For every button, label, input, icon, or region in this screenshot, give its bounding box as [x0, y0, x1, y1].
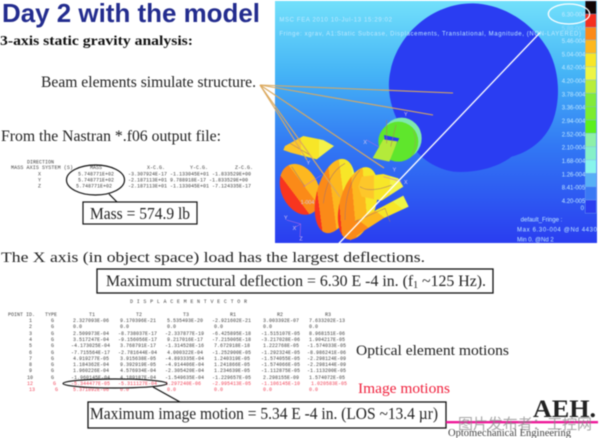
- colour scale labels: 0: [581, 206, 585, 212]
- displacement table: -4.914406E-04: [165, 362, 204, 368]
- large primary mirror disk: [389, 3, 558, 172]
- maximum value highlight: [338, 4, 590, 244]
- displacement table: TYPE: [45, 312, 57, 318]
- displacement table: 1.960226E-04: [73, 368, 109, 374]
- displacement table: 6: [29, 350, 32, 356]
- displacement table: G: [51, 324, 54, 330]
- X axis statement: The X axis (in object space) load has the largest deflections.: [1, 250, 425, 266]
- axis letters: X: [404, 180, 408, 186]
- displacement table: -2.298144E-09: [307, 362, 346, 368]
- displacement table: 0.0: [167, 387, 176, 393]
- displacement table: 9.170396E-21: [120, 318, 156, 324]
- colour scale bar: [585, 1, 596, 213]
- lens group two: [330, 162, 386, 244]
- displacement table: 0.0: [309, 324, 318, 330]
- colour scale labels: 3.78-004: [562, 92, 586, 98]
- coordinate axes markers: [287, 140, 402, 237]
- displacement table: POINT ID.: [8, 312, 35, 318]
- colour scale labels: 6.30-004: [562, 13, 586, 19]
- displacement table: -1.229657E-05: [212, 375, 251, 381]
- displacement table: 3.915638E-05: [120, 356, 156, 362]
- colour scale labels: 3.36-004: [562, 106, 586, 112]
- displacement table: G: [51, 350, 54, 356]
- colour scale labels: 5.88-004: [562, 27, 586, 33]
- axis letters: Y: [404, 112, 408, 118]
- displacement table: -2.298124E-09: [307, 356, 346, 362]
- displacement table: 4: [29, 337, 32, 343]
- displacement table: G: [51, 318, 54, 324]
- displacement table: R2: [277, 312, 283, 318]
- mass output table: Y-C.G.: [190, 165, 208, 171]
- fold mirror green assembly: [373, 118, 422, 162]
- maximum image motion callout: [88, 402, 446, 428]
- displacement table: -1.113200E-05: [307, 368, 346, 374]
- maximum deflection callout: Maximum structural deflection = 6.30 E -4 in. (f: [106, 273, 416, 290]
- displacement table: 13: [29, 387, 35, 393]
- displacement table: G: [51, 343, 54, 349]
- displacement table: 0.0: [263, 324, 272, 330]
- displacement table: -1.960145E-04: [71, 375, 110, 381]
- axis letters: [284, 112, 408, 243]
- colour scale labels: 4.62-004: [562, 66, 586, 72]
- displacement table: -1.574055E-05: [261, 356, 300, 362]
- mass output table: MASS AXIS SYSTEM (S): [11, 165, 73, 171]
- axis letters: Y: [284, 215, 288, 221]
- mass callout ellipse: [66, 165, 124, 202]
- mass output table: 5.748771E+02: [76, 184, 112, 190]
- displacement table: 1: [29, 318, 32, 324]
- displacement table: 2.298155E-09: [263, 375, 299, 381]
- displacement table: 1.297240E-06: [165, 381, 201, 387]
- displacement table: -8.986241E-06: [307, 350, 346, 356]
- displacement table: 1.020583E-05: [311, 381, 347, 387]
- displacement table: 9: [29, 368, 32, 374]
- red-orange lens: [272, 157, 328, 221]
- displacement table: -1.252900E-05: [212, 350, 251, 356]
- plot footer text: Min 0. @Nd 2: [517, 237, 554, 243]
- displacement table: 1.184362E-04: [73, 362, 109, 368]
- Nastran output label: From the Nastran *.f06 output file:: [1, 128, 221, 145]
- displacement table: T3: [183, 312, 189, 318]
- mass output table: Z-C.G.: [235, 165, 253, 171]
- displacement table: -1.549635E-04: [165, 375, 204, 381]
- displacement table: 5.371892E-06: [73, 387, 109, 393]
- displacement table: -4.173025E-04: [71, 343, 110, 349]
- displacement table: -2.305420E-04: [165, 368, 204, 374]
- axis letters: Y: [307, 161, 311, 167]
- displacement table: 5.535493E-20: [167, 318, 203, 324]
- displacement table: 4.919277E-05: [73, 356, 109, 362]
- displacement table: 12: [27, 381, 33, 387]
- yellow wedge element: [358, 174, 403, 201]
- watermark: 图片发布者：工控网: [458, 416, 592, 433]
- displacement table: -1.574033E-05: [307, 343, 346, 349]
- plot footer text: [517, 218, 598, 243]
- image motion callout ellipse: [63, 379, 180, 402]
- displacement table: R3: [325, 312, 331, 318]
- colour scale labels: 1.26-004: [562, 172, 586, 178]
- displacement table: 8.968151E-06: [309, 331, 345, 337]
- displacement table: -1.314528E-16: [165, 343, 204, 349]
- colour scale labels: 4.20-005: [562, 199, 586, 205]
- mass callout box: Mass = 574.9 lb: [90, 204, 190, 223]
- plot header text: MSC FEA 2010 10-Jul-13 15:29:02: [279, 17, 393, 23]
- displacement table: T2: [136, 312, 142, 318]
- displacement table: 1.222768E-05: [263, 343, 299, 349]
- displacement table: -2.995413E-05: [212, 381, 251, 387]
- displacement table: -2.337877E-19: [165, 331, 204, 337]
- image motions label: Image motions: [358, 381, 450, 397]
- lens group one: [308, 155, 362, 237]
- colour scale labels: 2.10-004: [562, 146, 586, 152]
- axis letters: Y: [393, 167, 397, 173]
- colour scale labels: 4.20-004: [562, 79, 586, 85]
- plot header text: [279, 17, 581, 37]
- displacement table: -7.215005E-18: [212, 337, 251, 343]
- displacement table: G: [55, 387, 58, 393]
- displacement table: 1.241866E-05: [214, 362, 250, 368]
- displacement table: 3.003392E-07: [263, 318, 299, 324]
- mass output table: X-C.G.: [147, 165, 165, 171]
- displacement table: 0.0: [120, 324, 129, 330]
- displacement table: G: [51, 331, 54, 337]
- displacement table: G: [53, 381, 56, 387]
- plot header text: Fringe: xgrav, A1:Static Subcase, Displacements, Translational, Magnitude, (NON-LAYERED): [279, 31, 581, 37]
- displacement table: 0.0: [214, 387, 223, 393]
- maximum deflection callout: 1: [413, 280, 418, 291]
- mass output table: Y: [38, 178, 41, 184]
- optical element motions label: Optical element motions: [356, 343, 509, 359]
- displacement table: -1.106145E-10: [261, 381, 300, 387]
- mass output table: MASS: [90, 165, 102, 171]
- displacement table: G: [51, 356, 54, 362]
- displacement table: 0.0: [263, 387, 272, 393]
- displacement table: 0.0: [309, 387, 318, 393]
- maximum deflection callout: [97, 269, 493, 293]
- displacement table: 7: [29, 356, 32, 362]
- displacement table: -1.574066E-05: [261, 362, 300, 368]
- displacement table: 5: [29, 343, 32, 349]
- displacement table: 0.0: [73, 324, 82, 330]
- displacement table: -1.292324E-05: [261, 350, 300, 356]
- displacement table: G: [51, 337, 54, 343]
- mass output table: 5.748771E+02: [78, 172, 114, 178]
- displacement table: 7.672918E-18: [214, 343, 250, 349]
- plot footer text: Max 6.30-004 @Nd 4430: [517, 228, 598, 234]
- mass output table: Z: [38, 184, 41, 190]
- axis letters: X: [363, 140, 367, 146]
- subheading: 3-axis static gravity analysis:: [0, 34, 193, 49]
- displacement table: -9.156056E-17: [118, 337, 157, 343]
- AEH logo: AEH.: [533, 396, 596, 423]
- displacement table: 10: [27, 375, 33, 381]
- displacement table: 4.189187E-04: [120, 375, 156, 381]
- axis letters: Z: [299, 237, 303, 243]
- displacement table: [8, 312, 347, 393]
- mass output table: -2.187113E+01 9.788918E-17 -1.833529E+00: [128, 178, 248, 184]
- displacement table: G: [51, 362, 54, 368]
- mass output table: X: [38, 172, 41, 178]
- AEH logo: [446, 396, 598, 438]
- displacement table: 3: [29, 331, 32, 337]
- colour scale labels: 2.52-004: [562, 132, 586, 138]
- beam elements label: Beam elements simulate structure.: [41, 74, 256, 91]
- displacement table: -1.112875E-05: [261, 368, 300, 374]
- colour scale labels: 5.46-004: [562, 39, 586, 45]
- wire details: [290, 143, 392, 222]
- displacement table: 0.0: [120, 387, 129, 393]
- displacement table: 1.574072E-05: [309, 375, 345, 381]
- displacement table: 2.509973E-04: [73, 331, 109, 337]
- mass output table: 5.748771E+02: [78, 178, 114, 184]
- displacement table: -6.425895E-18: [212, 331, 251, 337]
- displacement table: -2.781644E-04: [118, 350, 157, 356]
- displacement table: 0.0: [214, 324, 223, 330]
- displacement table: -4.893335E-04: [165, 356, 204, 362]
- displacement table: 1.234639E-05: [214, 368, 250, 374]
- beam element pointer lines: [260, 85, 453, 197]
- colour scale labels: 1.68-004: [562, 159, 586, 165]
- displacement table: -2.921602E-21: [212, 318, 251, 324]
- displacement table: 7.633202E-13: [309, 318, 345, 324]
- displacement vector heading: D I S P L A C E M E N T V E C T O R: [130, 299, 247, 305]
- displacement table: 9.392919E-05: [120, 362, 156, 368]
- displacement table: 4.000322E-04: [167, 350, 203, 356]
- displacement table: 0.0: [167, 324, 176, 330]
- FEA contour plot panel: [272, 1, 598, 244]
- plot footer text: default_Fringe :: [521, 218, 563, 224]
- maximum image motion callout: Maximum image motion = 5.34 E -4 in. (LOS ~13.4 µr): [90, 404, 438, 423]
- displacement table: 4.576934E-04: [120, 368, 156, 374]
- mass output table: -3.307924E-17 -1.133045E+01 -1.833529E+00: [128, 172, 251, 178]
- displacement table: 9.217016E-17: [167, 337, 203, 343]
- mass output table: DIRECTION: [27, 160, 54, 166]
- lower detector element: [350, 196, 409, 241]
- displacement table: 1.904217E-05: [309, 337, 345, 343]
- displacement table: G: [51, 375, 54, 381]
- displacement table: 3.768791E-17: [120, 343, 156, 349]
- displacement table: -7.715564E-17: [71, 350, 110, 356]
- colour scale labels: 2.94-004: [562, 119, 586, 125]
- displacement table: 2: [29, 324, 32, 330]
- displacement table: 2.327093E-06: [73, 318, 109, 324]
- displacement table: -5.344477E-05: [71, 381, 110, 387]
- displacement table: -5.311127E-04: [118, 381, 157, 387]
- displacement table: -8.738037E-17: [118, 331, 157, 337]
- colour scale labels: [562, 13, 586, 212]
- colour scale labels: 8.41-005: [562, 186, 586, 192]
- maximum deflection callout: ~125 Hz).: [418, 273, 486, 290]
- displacement table: G: [51, 368, 54, 374]
- axis letters: X: [293, 226, 297, 232]
- displacement table: T1: [89, 312, 95, 318]
- mass output table: [11, 160, 253, 190]
- displacement table: 8: [29, 362, 32, 368]
- axis letters: 1-004: [301, 200, 314, 206]
- displacement table: -1.515107E-05: [261, 331, 300, 337]
- displacement table: 3.517247E-04: [73, 337, 109, 343]
- displacement table: -3.217028E-06: [261, 337, 300, 343]
- colour scale labels: 5.04-004: [562, 52, 586, 58]
- yellow optical element: [283, 136, 334, 159]
- mass output table: -2.187113E+01 -1.133045E+01 -7.124335E-17: [128, 184, 251, 190]
- displacement table: 1.240319E-05: [214, 356, 250, 362]
- displacement table: R1: [230, 312, 236, 318]
